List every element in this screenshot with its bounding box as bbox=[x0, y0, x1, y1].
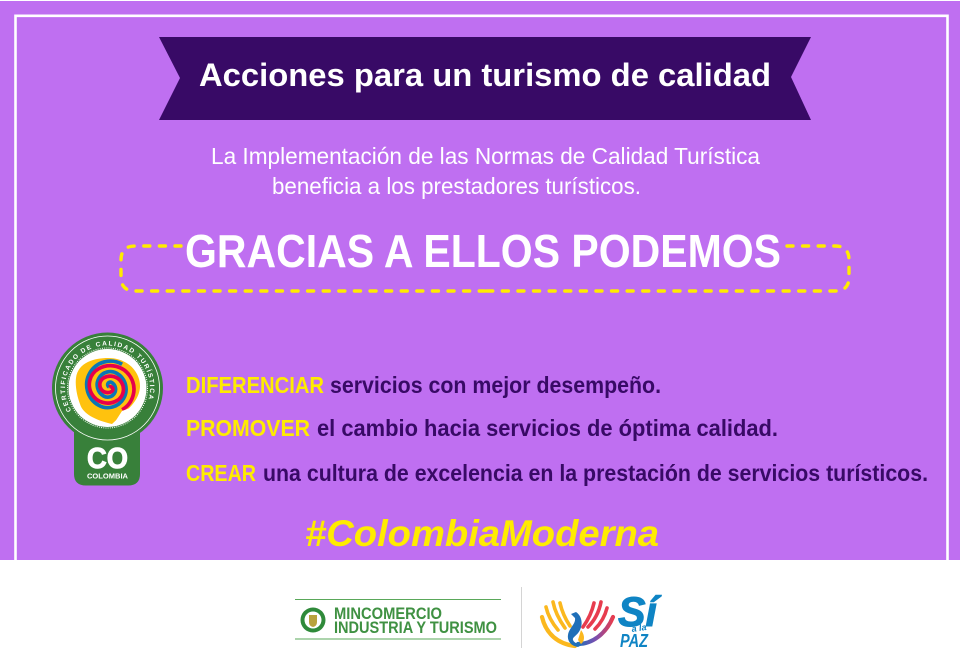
intro text bbox=[211, 143, 760, 199]
icon: certification badge: CERTIFICADO DE CALIDAD TURÍSTICA bbox=[60, 341, 154, 412]
footer band bbox=[0, 560, 960, 671]
footer divider bbox=[520, 587, 522, 648]
benefit list bbox=[186, 372, 928, 486]
banner ribbon bbox=[159, 37, 811, 120]
a la: a la bbox=[631, 622, 647, 634]
hashtag: #ColombiaModerna bbox=[305, 513, 659, 554]
title banner bbox=[159, 37, 811, 120]
CO mark: CO bbox=[87, 443, 128, 475]
panel: white frame bbox=[16, 16, 948, 560]
benefit: promover: el cambio hacia servicios de óptima calidad. bbox=[317, 415, 778, 441]
Paz: PAZ bbox=[620, 631, 649, 651]
badge tab bbox=[74, 430, 140, 486]
intro text: beneficia a los prestadores turísticos. bbox=[272, 173, 641, 199]
icon: dove and purple arc bbox=[568, 612, 613, 647]
ministry name: INDUSTRIA Y TURISMO bbox=[334, 619, 497, 637]
Si: Sí bbox=[618, 588, 662, 635]
logo: Sí a la paz bbox=[542, 588, 662, 651]
ministry name: MINCOMERCIO bbox=[334, 605, 442, 623]
badge circle bbox=[52, 332, 163, 444]
benefit: diferenciar: servicios con mejor desempeño. bbox=[330, 372, 661, 398]
benefit: diferenciar: DIFERENCIAR bbox=[186, 372, 324, 398]
title: Acciones para un turismo de calidad bbox=[199, 57, 771, 93]
benefit: diferenciar bbox=[186, 372, 661, 398]
ministry name bbox=[334, 605, 497, 637]
benefit: crear: CREAR bbox=[186, 460, 256, 486]
logo: Mincomercio bbox=[295, 600, 501, 639]
benefit: promover: PROMOVER bbox=[186, 415, 310, 441]
icon: yellow hand bbox=[542, 602, 575, 646]
intro text: La Implementación de las Normas de Calidad Turística bbox=[211, 143, 760, 169]
dashed callout frame bbox=[121, 246, 849, 291]
benefit: crear: una cultura de excelencia en la prestación de servicios turísticos. bbox=[263, 460, 928, 486]
callout heading: GRACIAS A ELLOS PODEMOS bbox=[185, 225, 781, 277]
Colombia label: COLOMBIA bbox=[87, 472, 129, 480]
icon: red hand bbox=[583, 602, 607, 629]
icon: coat of arms bbox=[300, 608, 326, 632]
spiral speech mark bbox=[76, 352, 143, 425]
curved certificate text bbox=[65, 345, 150, 410]
icon: certification badge bbox=[52, 332, 163, 486]
